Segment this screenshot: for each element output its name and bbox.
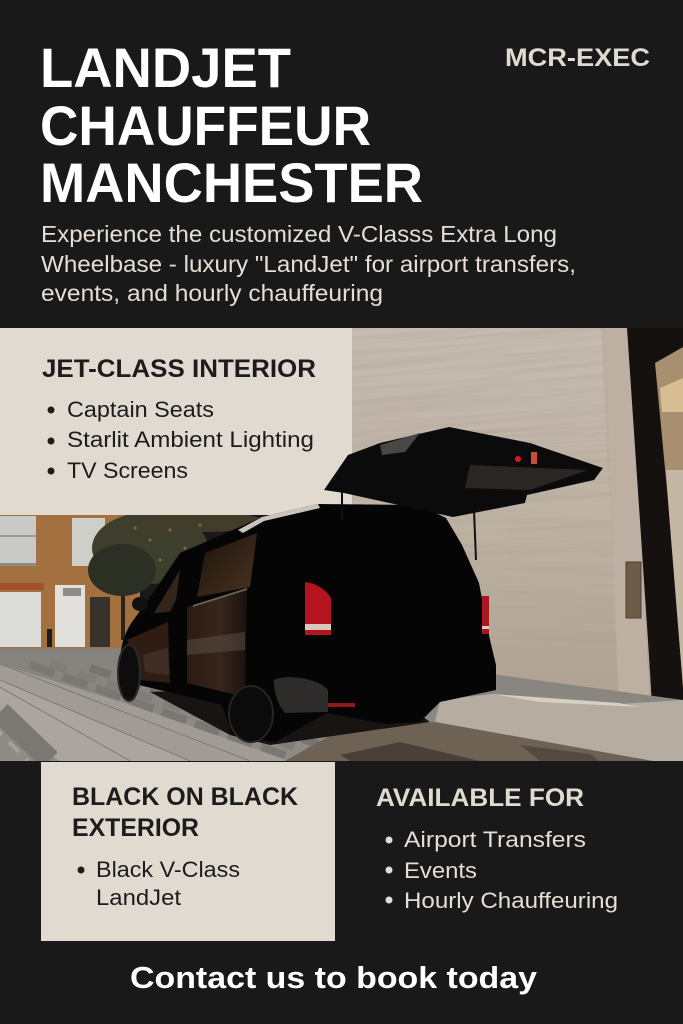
- mirror: [132, 597, 148, 611]
- heading: BLACK ON BLACK: [72, 783, 298, 811]
- call to action: Contact us to book today: [130, 960, 538, 995]
- lower door reflection: [187, 590, 247, 697]
- plaque on wall: [626, 562, 641, 618]
- panel: jet-class interior: [0, 328, 352, 515]
- panel: black on black exterior: [41, 762, 335, 941]
- rear wheel: [229, 686, 273, 742]
- exterior list: [78, 857, 240, 910]
- exterior list: Black V-Class: [96, 857, 240, 882]
- photo background: stone building and courtyard: [0, 328, 683, 761]
- services list: Airport Transfers: [404, 827, 586, 852]
- heading: EXTERIOR: [72, 814, 199, 842]
- lit window: [655, 347, 683, 687]
- brick building: [0, 515, 140, 650]
- panel: available for: [376, 784, 618, 913]
- title: [40, 36, 423, 214]
- paving joints: [0, 664, 250, 761]
- feature list: Starlit Ambient Lighting: [67, 427, 314, 452]
- bumper reflection: [274, 677, 328, 713]
- services list: [386, 827, 618, 913]
- heading: AVAILABLE FOR: [376, 784, 584, 812]
- brand mark: MCR-EXEC: [505, 44, 650, 72]
- rear reflector: [328, 703, 355, 707]
- paved ground: [0, 648, 683, 761]
- exterior list: LandJet: [96, 885, 181, 910]
- title: LANDJET: [40, 36, 291, 99]
- title: CHAUFFEUR: [40, 94, 371, 157]
- subtitle: [41, 221, 576, 306]
- subtitle: Wheelbase - luxury "LandJet" for airport transfers,: [41, 251, 576, 277]
- van body: [120, 504, 496, 742]
- tailgate lights: [515, 456, 521, 462]
- feature list: [48, 397, 314, 483]
- dark door frame: [627, 328, 683, 700]
- heading: JET-CLASS INTERIOR: [42, 355, 316, 383]
- side glass reflection: [197, 533, 257, 597]
- van with open tailgate: [118, 427, 603, 742]
- title: MANCHESTER: [40, 151, 423, 214]
- open tailgate: [324, 427, 603, 517]
- roof highlight: [238, 504, 320, 533]
- subtitle: Experience the customized V-Classs Extra Long: [41, 221, 557, 247]
- checker paving: [0, 664, 330, 761]
- services list: Events: [404, 858, 477, 883]
- front wheel: [118, 645, 140, 701]
- tree: [88, 512, 265, 640]
- services list: Hourly Chauffeuring: [404, 888, 618, 913]
- tail light right: [482, 596, 489, 634]
- stone wall: [352, 328, 652, 696]
- feature list: TV Screens: [67, 458, 188, 483]
- tail light left: [305, 582, 331, 635]
- feature list: Captain Seats: [67, 397, 214, 422]
- front wing reflection: [127, 622, 170, 683]
- boot struts: [474, 510, 476, 560]
- subtitle: events, and hourly chauffeuring: [41, 280, 383, 306]
- heading: [72, 783, 298, 842]
